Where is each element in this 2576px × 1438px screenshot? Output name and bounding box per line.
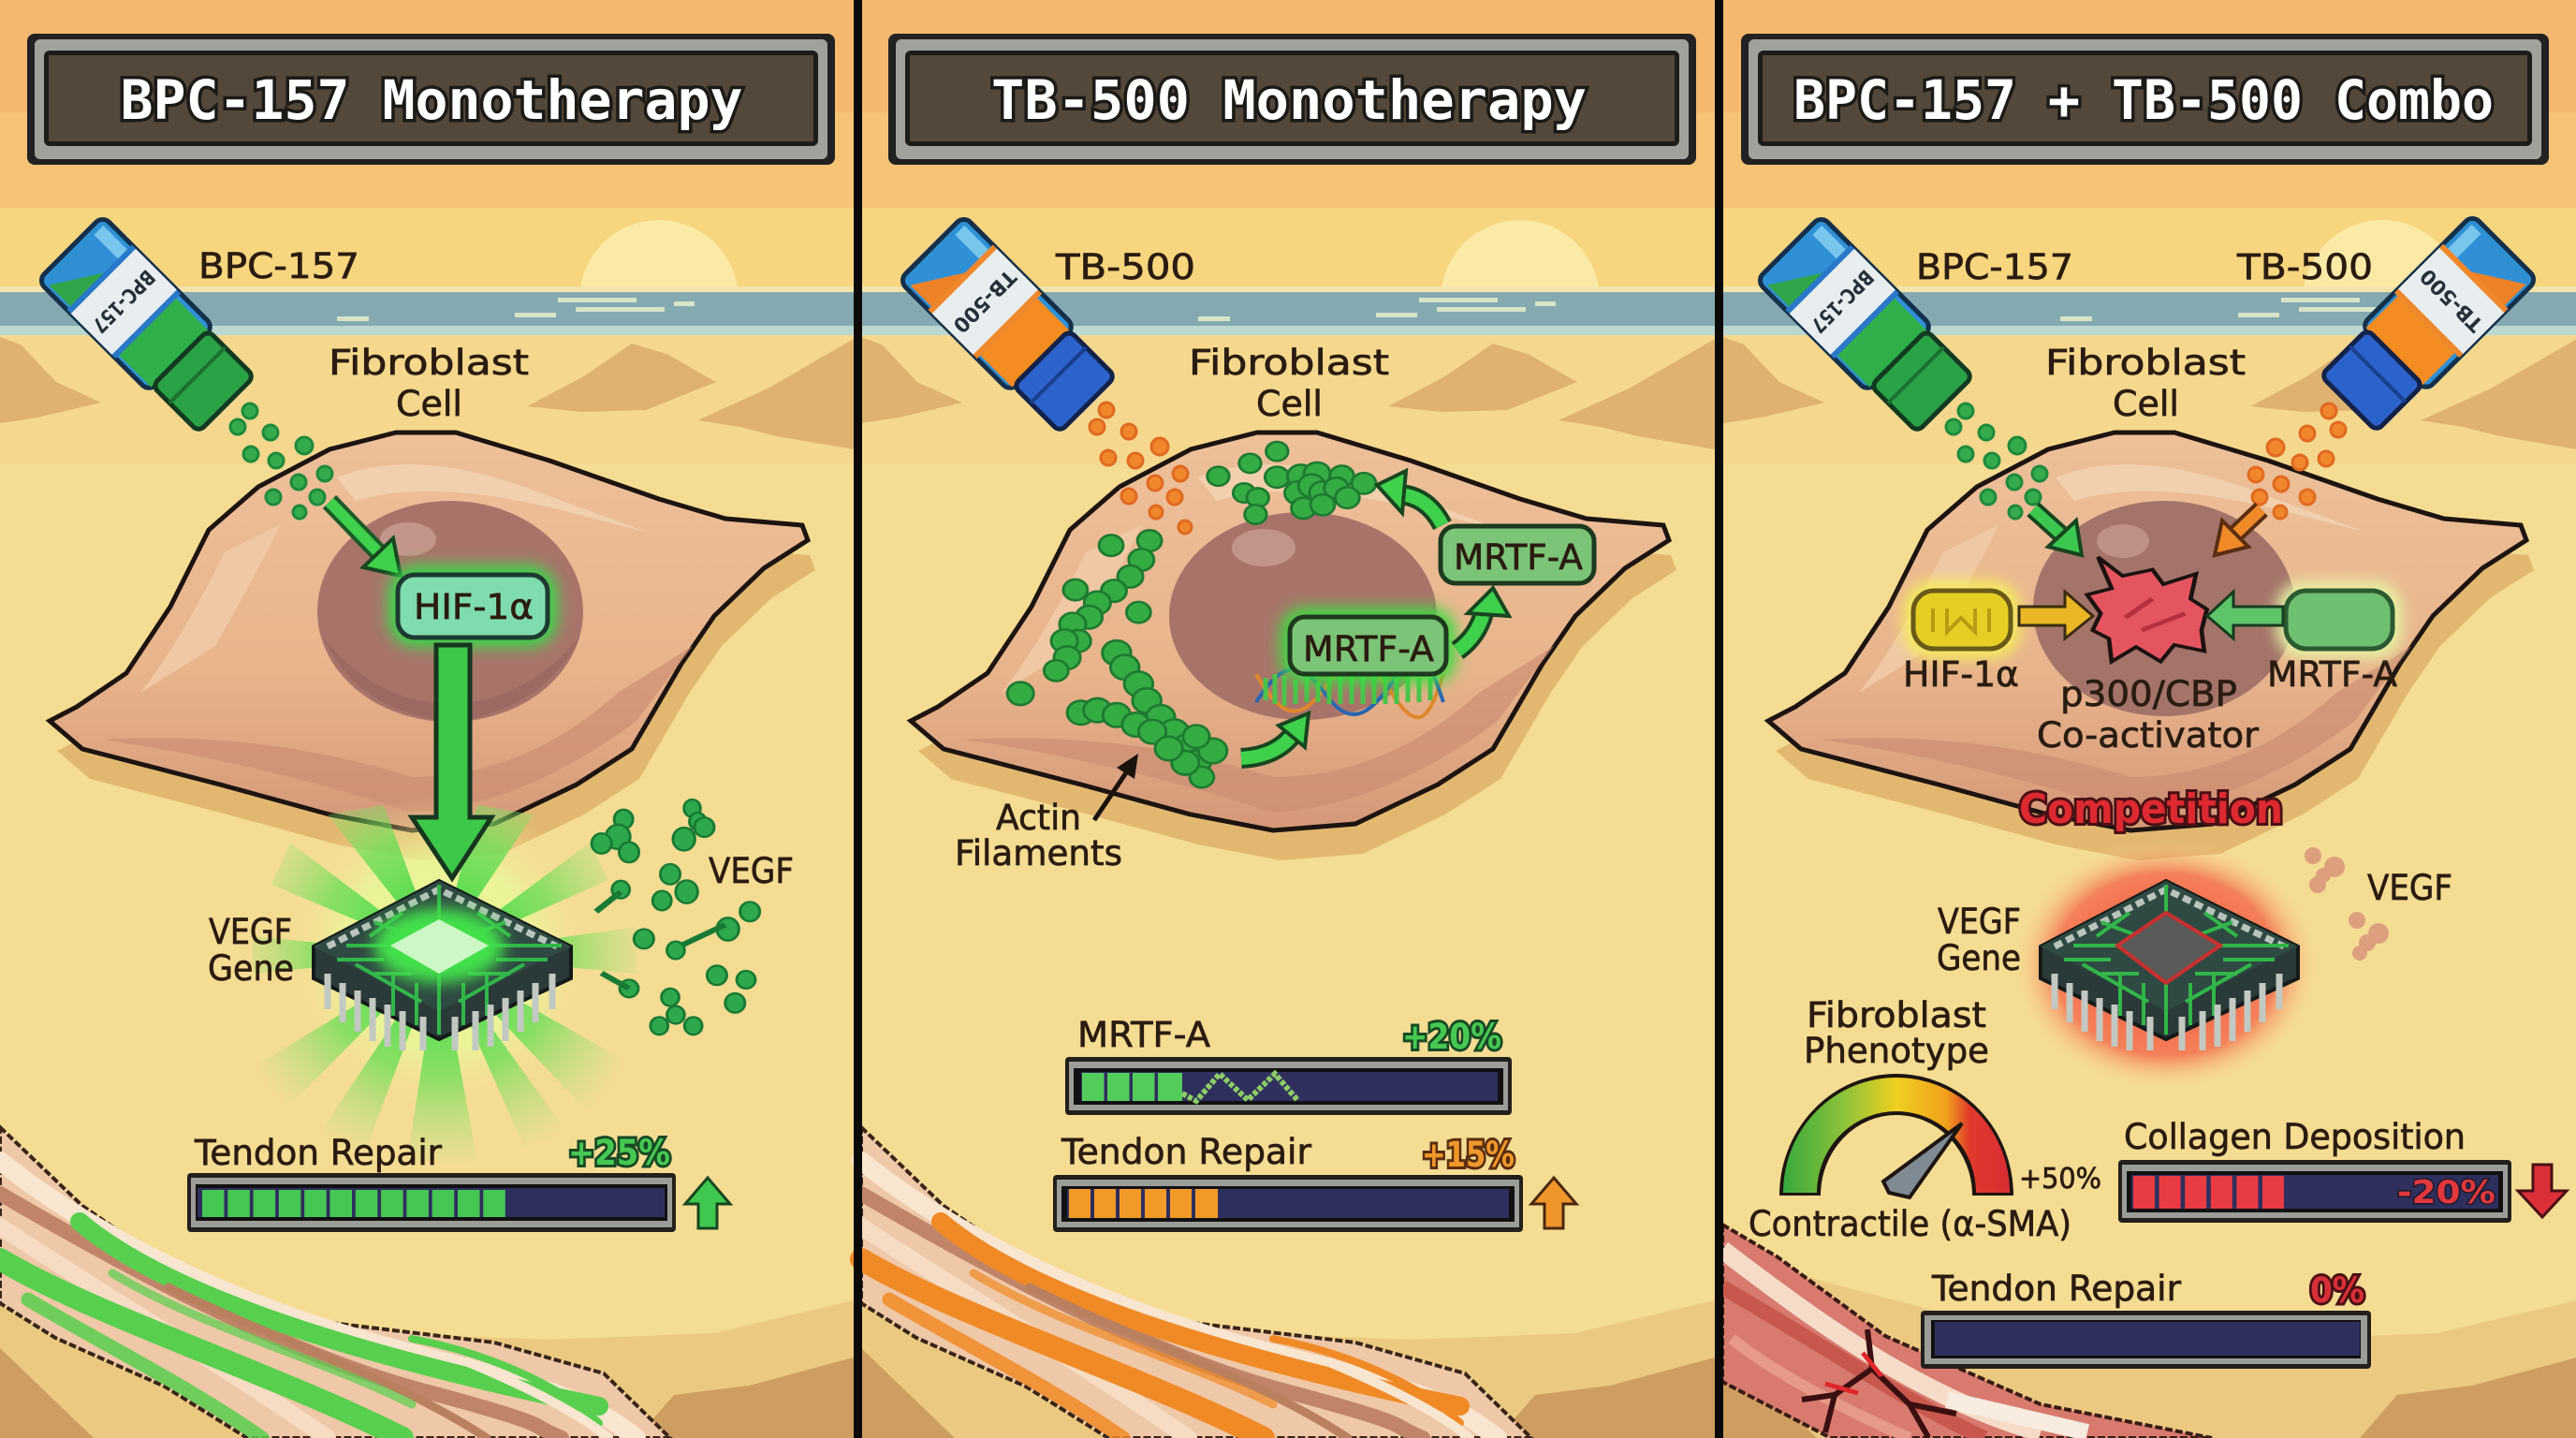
icon: BPC-157 bottle xyxy=(1756,215,1978,437)
label: p300/CBP Co-activator: Co-activator xyxy=(2037,715,2260,756)
label: Competition: Competition xyxy=(2019,785,2283,833)
label: Contractile (α-SMA): Contractile (α-SMA) xyxy=(1749,1204,2071,1244)
value: +20%: +20% xyxy=(1402,1017,1501,1057)
value: +15%: +15% xyxy=(1422,1135,1515,1175)
icon: orange tendon xyxy=(861,1127,1531,1438)
icon: damaged tendon xyxy=(1722,1225,2212,1438)
progress bar: Tendon Repair xyxy=(187,1173,676,1232)
icon: p300/CBP starburst xyxy=(2087,557,2207,662)
background: beach scene xyxy=(0,0,854,1438)
pill: MRTF-A nuclear: MRTF-A xyxy=(1303,629,1434,669)
green rays around VEGF gene xyxy=(253,796,637,1161)
label: Fibroblast Cell: Cell xyxy=(1256,384,1323,424)
icon: VEGF gene chip, inactive xyxy=(2041,881,2298,1050)
value: 0%: 0% xyxy=(2310,1270,2364,1311)
gauge needle xyxy=(1883,1123,1962,1197)
value: +50%: +50% xyxy=(2019,1163,2101,1196)
icon: TB-500 bottle xyxy=(2316,214,2538,436)
pill: MRTF-A cytoplasmic xyxy=(1441,526,1594,583)
progress bar: Tendon Repair empty xyxy=(1921,1311,2371,1369)
label: Fibroblast Cell: Cell xyxy=(396,384,462,424)
label: Actin Filaments xyxy=(955,798,1122,873)
value: +25%: +25% xyxy=(568,1133,670,1173)
arrow: actin label xyxy=(1094,754,1138,820)
nucleus xyxy=(1169,512,1437,720)
label: VEGF: VEGF xyxy=(2367,868,2452,908)
label: Tendon Repair: Tendon Repair xyxy=(1061,1132,1312,1172)
label: Tendon Repair: Tendon Repair xyxy=(1931,1269,2182,1309)
arrow: MRTF-A to p300/CBP xyxy=(2207,592,2283,638)
label: Fibroblast Phenotype: Phenotype xyxy=(1804,1031,1989,1071)
fibroblast cell xyxy=(1768,433,2534,860)
label: Fibroblast Cell: Cell xyxy=(2113,384,2179,424)
icon: green tendon xyxy=(0,1127,670,1438)
label: Fibroblast Cell: Fibroblast xyxy=(2045,343,2246,383)
label: p300/CBP Co-activator: p300/CBP xyxy=(2060,674,2237,714)
arrow: particles to HIF-1α xyxy=(329,502,401,576)
panel: TB-500 monotherapy xyxy=(861,0,1715,1438)
label: TB-500: TB-500 xyxy=(2236,247,2373,287)
actin filaments xyxy=(1007,442,1376,787)
panel: BPC-157 monotherapy xyxy=(0,0,854,1438)
progress bar: Collagen Deposition xyxy=(2118,1160,2511,1223)
label: VEGF: VEGF xyxy=(709,851,794,891)
panel dividers xyxy=(854,0,1723,1438)
icon: TB-500 bottle xyxy=(899,215,1120,437)
label: BPC-157: BPC-157 xyxy=(1916,247,2073,287)
particles: faded VEGF xyxy=(2305,847,2389,961)
progress bar: Tendon Repair xyxy=(1053,1175,1523,1232)
label: Fibroblast Cell xyxy=(329,343,529,424)
arrow: actin to MRTF-A xyxy=(1241,713,1309,758)
progress bar: MRTF-A xyxy=(1065,1057,1512,1115)
icon: BPC-157 bottle: BPC-157 xyxy=(1806,265,1878,337)
background: beach scene xyxy=(861,0,1715,1438)
label: Fibroblast Phenotype: Fibroblast xyxy=(1807,995,1986,1035)
arrow: tendon repair up xyxy=(1531,1178,1576,1228)
heading banner: BPC-157 + TB-500 Combo: BPC-157 + TB-500 Combo xyxy=(1793,68,2494,132)
label: p300/CBP Co-activator xyxy=(2037,674,2260,756)
red glow around VEGF gene xyxy=(2012,838,2320,1091)
pill: MRTF-A nuclear xyxy=(1281,608,1456,683)
icon: TB-500 bottle: TB-500 xyxy=(948,265,1020,337)
DNA strand xyxy=(1256,659,1443,717)
background: beach scene xyxy=(1723,0,2576,1438)
pill: HIF-1α yellow xyxy=(1904,581,2020,658)
fibroblast cell xyxy=(911,433,1676,860)
icon: TB-500 bottle: TB-500 xyxy=(2416,264,2488,336)
label: VEGF Gene: Gene xyxy=(1937,938,2021,978)
label: TB-500: TB-500 xyxy=(1055,247,1195,287)
label: Fibroblast Phenotype xyxy=(1804,995,1989,1071)
label: Actin Filaments: Actin xyxy=(996,798,1081,838)
particles: BPC-157 xyxy=(1946,404,2047,519)
label: Tendon Repair: Tendon Repair xyxy=(194,1133,443,1173)
arrow: HIF-1α to p300/CBP xyxy=(2019,592,2093,638)
arrow: TB-500 to p300/CBP xyxy=(2215,509,2261,555)
icon: VEGF gene chip xyxy=(314,881,571,1050)
heading banner: BPC-157 Monotherapy xyxy=(27,34,835,165)
label: MRTF-A: MRTF-A xyxy=(2267,654,2397,695)
panel: BPC-157 + TB-500 combo xyxy=(1722,0,2576,1438)
label: VEGF Gene xyxy=(208,912,294,989)
heading banner: BPC-157 Monotherapy: BPC-157 Monotherapy xyxy=(120,68,742,132)
nucleus xyxy=(2033,501,2295,716)
label: BPC-157: BPC-157 xyxy=(198,246,359,286)
label: Collagen Deposition: Collagen Deposition xyxy=(2124,1117,2466,1157)
fibroblast cell xyxy=(50,433,815,860)
heading banner: BPC-157 + TB-500 Combo xyxy=(1741,34,2549,165)
heading banner: TB-500 Monotherapy: TB-500 Monotherapy xyxy=(991,68,1587,132)
arrow: HIF-1α to VEGF gene xyxy=(412,645,491,878)
label: HIF-1α: HIF-1α xyxy=(1903,654,2019,695)
label: Fibroblast Cell: Fibroblast xyxy=(1189,343,1389,383)
icon: BPC-157 bottle: BPC-157 xyxy=(87,265,159,337)
arrow: BPC-157 to p300/CBP xyxy=(2033,509,2082,555)
pill: MRTF-A green xyxy=(2276,581,2402,658)
icon: BPC-157 bottle xyxy=(37,215,259,437)
label: VEGF Gene: Gene xyxy=(208,948,294,989)
nucleus xyxy=(317,501,583,722)
arrow: tendon repair up xyxy=(685,1178,730,1228)
label: Fibroblast Cell xyxy=(2045,343,2246,424)
pill: HIF-1α: HIF-1α xyxy=(414,587,534,627)
arrow: MRTF-A to actin xyxy=(1377,471,1442,525)
particles: BPC-157 xyxy=(230,404,332,519)
gauge: contractile α-SMA xyxy=(1800,1094,1993,1197)
label: MRTF-A: MRTF-A xyxy=(1077,1015,1210,1055)
label: Actin Filaments: Filaments xyxy=(955,833,1122,873)
particles: TB-500 xyxy=(1090,403,1192,534)
label: VEGF Gene: VEGF xyxy=(209,912,292,952)
label: Fibroblast Cell: Fibroblast xyxy=(329,343,529,383)
arrow: collagen down xyxy=(2518,1165,2567,1217)
label: Fibroblast Cell xyxy=(1189,343,1389,424)
arrow: nuclear to cytoplasm xyxy=(1457,588,1509,651)
pill: MRTF-A cytoplasmic: MRTF-A xyxy=(1454,537,1583,578)
value: -20%: -20% xyxy=(2397,1174,2496,1211)
label: VEGF Gene: VEGF xyxy=(1938,902,2021,942)
particles: VEGF clusters xyxy=(592,800,760,1034)
label: VEGF Gene xyxy=(1937,902,2021,978)
pill: HIF-1α xyxy=(388,565,557,647)
heading banner: TB-500 Monotherapy xyxy=(888,34,1696,165)
particles: TB-500 xyxy=(2248,404,2346,519)
